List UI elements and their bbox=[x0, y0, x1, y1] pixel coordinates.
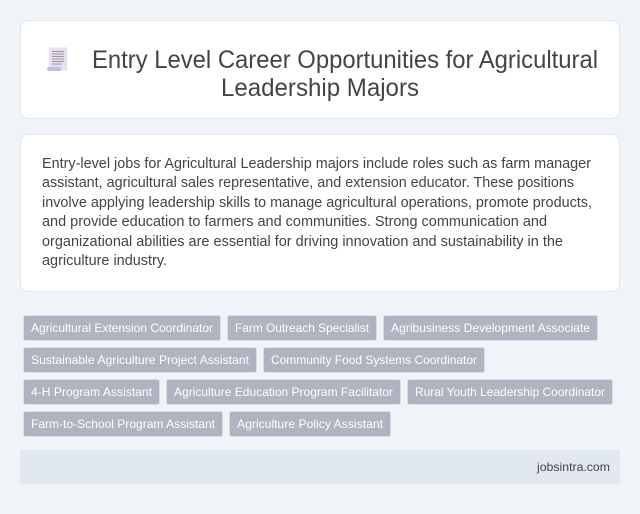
heading: Leadership Majors bbox=[221, 74, 419, 102]
tag bbox=[24, 412, 222, 436]
tag: Agriculture Education Program Facilitator bbox=[174, 385, 393, 399]
tag: Agribusiness Development Associate bbox=[391, 321, 590, 335]
tag: Agriculture Policy Assistant bbox=[237, 417, 384, 431]
tag: Sustainable Agriculture Project Assistant bbox=[31, 353, 250, 367]
tags: career list bbox=[24, 316, 612, 436]
text block: description: assistant, agricultural sales representative, and extension educator. These positions bbox=[42, 175, 574, 191]
text block: description: and provide education to farmers and communities. Strong communication and bbox=[42, 214, 547, 230]
tag bbox=[24, 380, 160, 404]
tag: Farm-to-School Program Assistant bbox=[31, 417, 216, 431]
text block: description: agriculture industry. bbox=[42, 253, 167, 269]
tag: Farm Outreach Specialist bbox=[235, 321, 370, 335]
text block: description bbox=[42, 156, 592, 269]
tag bbox=[24, 316, 220, 340]
icon: document scroll bbox=[47, 48, 67, 71]
panel: description bbox=[20, 134, 620, 292]
tag bbox=[166, 380, 400, 404]
tag bbox=[228, 316, 376, 340]
tag bbox=[408, 380, 612, 404]
tag: Community Food Systems Coordinator bbox=[271, 353, 477, 367]
tag: Rural Youth Leadership Coordinator bbox=[415, 385, 605, 399]
footer text: site name: jobsintra.com bbox=[536, 460, 610, 474]
tag bbox=[24, 348, 256, 372]
heading: Entry Level Career Opportunities for Agricultural bbox=[92, 46, 598, 74]
tag bbox=[264, 348, 484, 372]
tag bbox=[230, 412, 390, 436]
text block: description: involve applying leadership skills to manage agricultural operations, promote products, bbox=[42, 195, 592, 211]
text block: description: Entry-level jobs for Agricultural Leadership majors include roles such as farm manager bbox=[42, 156, 591, 172]
tag: Agricultural Extension Coordinator bbox=[31, 321, 213, 335]
footer bbox=[20, 450, 620, 484]
text block: description: organizational abilities are essential for driving innovation and sustainability in the bbox=[42, 234, 563, 250]
panel: title header bbox=[20, 20, 620, 118]
tag bbox=[384, 316, 598, 340]
tag: 4-H Program Assistant bbox=[31, 385, 153, 399]
heading bbox=[92, 46, 598, 102]
